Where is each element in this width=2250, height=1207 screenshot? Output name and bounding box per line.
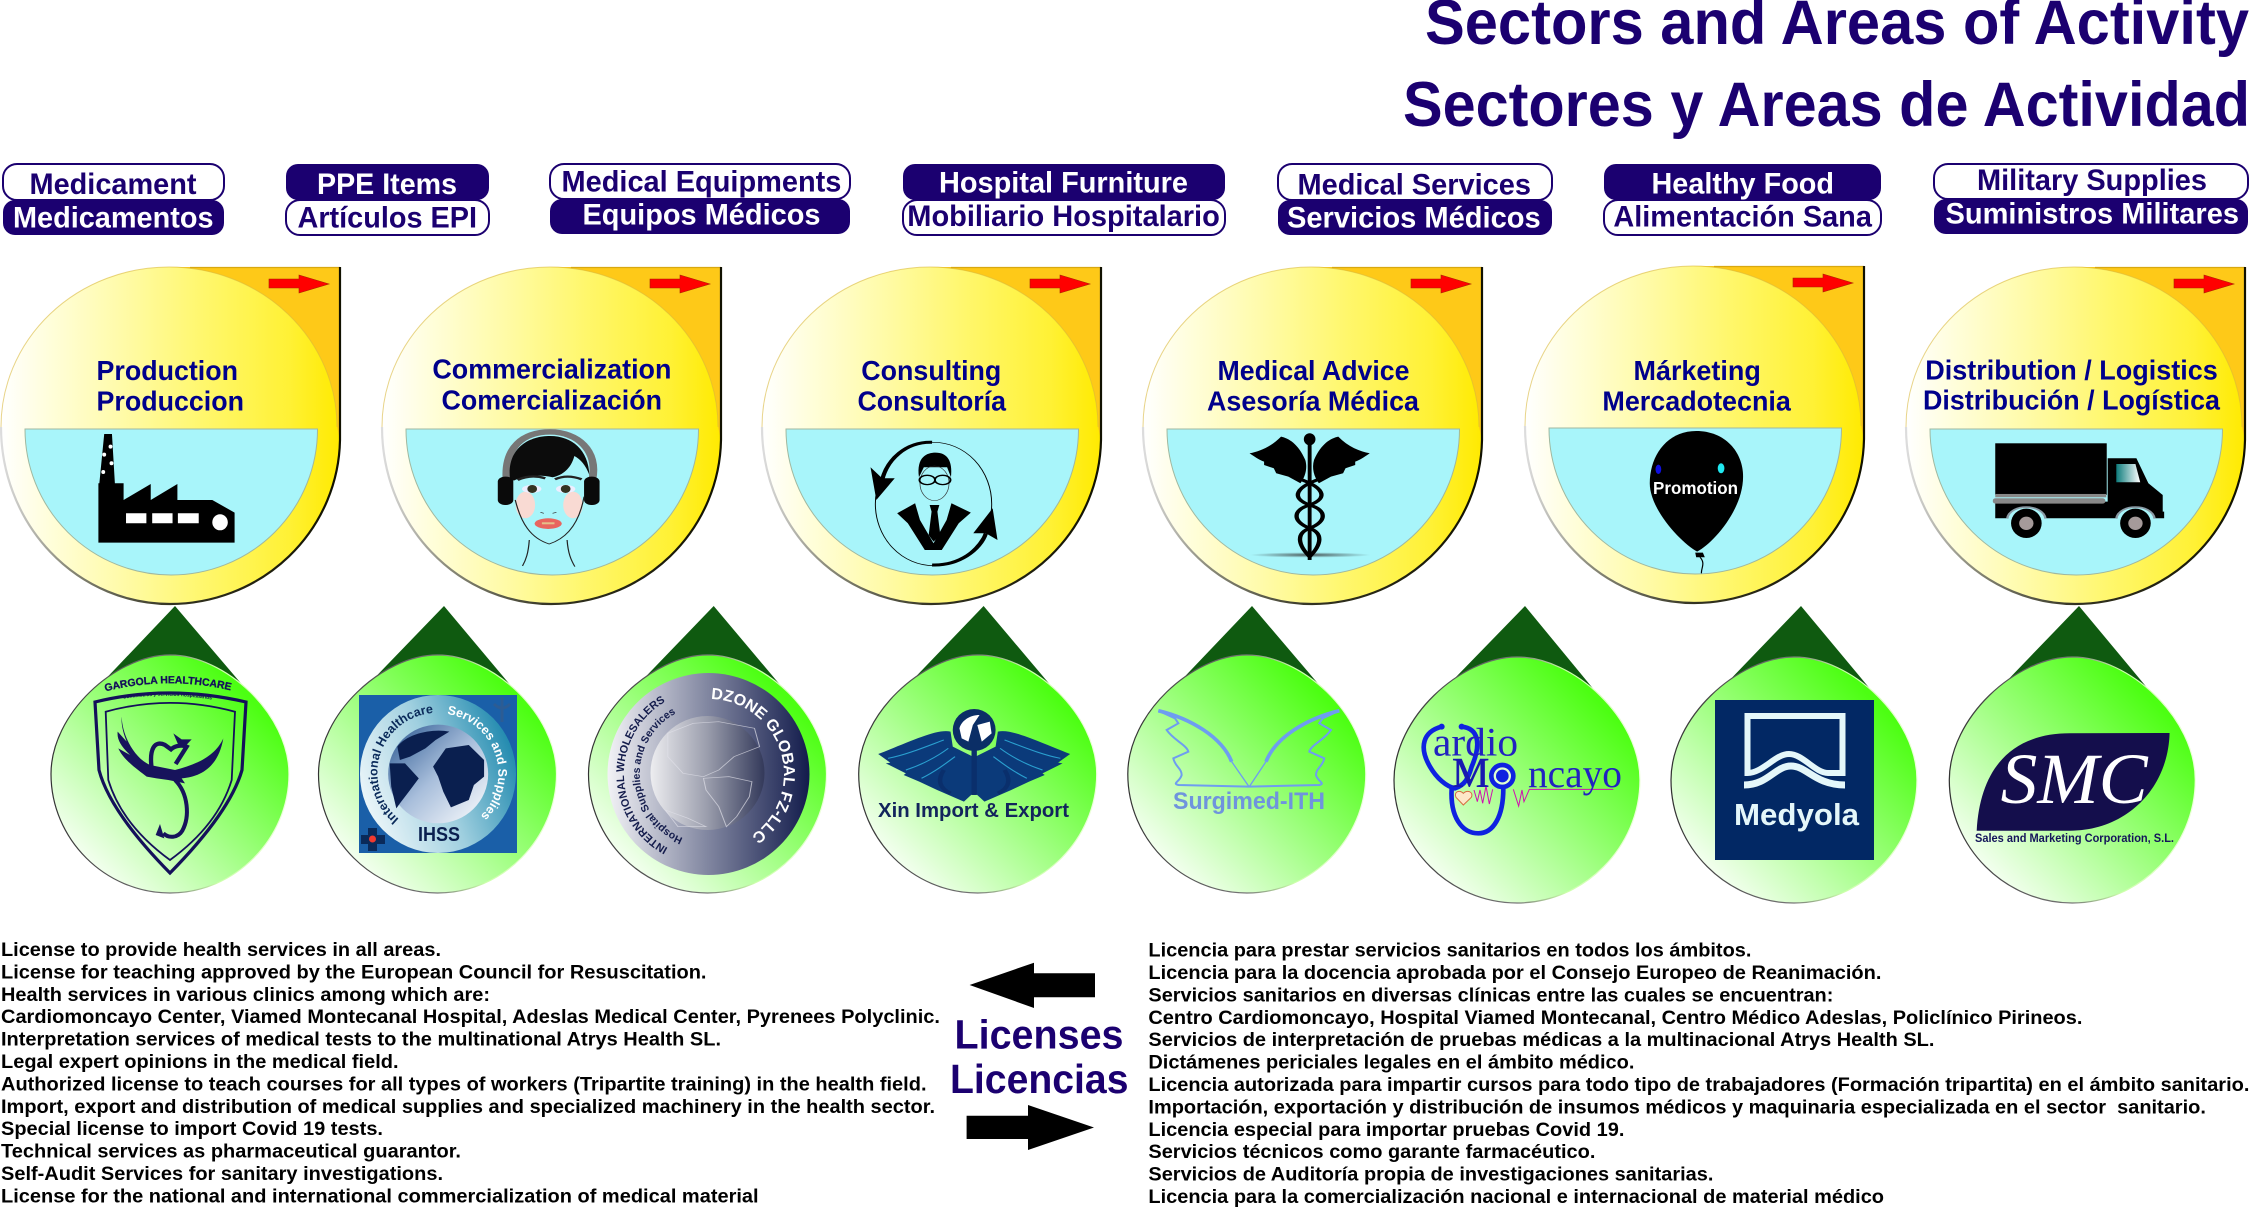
panel: Distribution: Distribución / Logística [1923,384,2220,415]
logo drop: Xin Import & Export [859,606,1097,893]
sector pill: Medical Services: Servicios Médicos [1287,202,1541,234]
text block: licenses in English: License for the national and international commercialization of medical material [1,1185,759,1207]
sector pill: PPE Items: PPE Items [317,168,457,201]
logo: IHSS globe badge: Services and Supplies [448,706,507,820]
logo: Gargola shield and dragon: Suministros y servicios hospitalarios [124,694,212,700]
panel: Commercialization [382,267,721,604]
text block: licenses in English: License to provide health services in all areas. [1,939,441,961]
sector pill: Medicament: Medicamentos [13,202,214,234]
logo drop: Surgimed-ITH [1128,606,1366,893]
panel: Commercialization: Comercialización [442,384,662,415]
heading: Licenses / Licencias [950,1012,1128,1102]
logo: Cardio Moncayo stethoscope: M [1452,751,1489,797]
sector pill: Military Supplies [1934,164,2248,234]
icon: consultant with cycle arrows [871,442,998,566]
arrow: pointing left [970,963,1095,1008]
logo drop: SMC [1949,606,2195,903]
logo: IHSS globe badge: IHSS [418,824,460,846]
logo drop: IHSS [318,606,557,894]
text block: licenses in English: License for teaching approved by the European Council for Resuscitation. [1,961,706,983]
arrow: pointing right [967,1105,1094,1150]
logo drop: Medyola [1671,606,1917,903]
panel: Commercialization: Commercialization [432,354,671,385]
logo: Surgimed wings [1158,711,1339,815]
panel: Production [1,267,340,604]
sector pill: Medical Services: Medical Services [1298,168,1531,201]
icon: balloon: Promotion [1653,478,1738,498]
logo: DZONE round badge: INTERNATIONAL WHOLESALERS [616,696,668,854]
logo: IHSS globe badge: International Healthcare [368,706,432,825]
sector pill: Healthy Food [1604,164,1881,235]
text block: licenses in English: Interpretation services of medical tests to the multinational Atrys Health SL. [1,1029,721,1051]
panel: Production: Production [96,355,238,386]
text block: licenses in English: Authorized license to teach courses for all types of workers (Tripartite training) in the health field. [1,1073,926,1095]
logo: DZONE round badge [608,673,810,875]
sector pill: Medical Equipments [550,164,850,234]
panel: Marketing [1525,266,1864,603]
text block: licenses in English [1,939,940,1207]
panel: Marketing: Márketing [1634,355,1761,386]
text block: licenses in Spanish: Centro Cardiomoncayo, Hospital Viamed Montecanal, Centro Médico Adeslas, Policlínico Pirineos. [1148,1007,2082,1029]
text block: licenses in Spanish: Licencia autorizada para impartir cursos para todo tipo de trabajadores (Formación tripartita) en el ámbito sanitario. [1148,1074,2249,1096]
text block: licenses in English: Special license to import Covid 19 tests. [1,1118,383,1140]
logo: Cardio Moncayo stethoscope: ncayo [1528,751,1622,796]
logo: Gargola shield and dragon: GARGOLA HEALTHCARE [104,676,232,691]
icon: truck [1993,443,2164,538]
logo: Cardio Moncayo stethoscope [1424,720,1622,833]
sector pill: Medical Equipments: Medical Equipments [562,166,841,199]
logo: winged globe [878,709,1070,822]
text block: licenses in English: Self-Audit Services for sanitary investigations. [1,1163,443,1185]
logo drop: Gargola Healthcare [50,606,290,894]
text block: licenses in Spanish: Licencia para prestar servicios sanitarios en todos los ámbitos. [1148,940,1751,962]
sector pill: Hospital Furniture [903,164,1225,235]
text block: licenses in Spanish: Licencia especial para importar pruebas Covid 19. [1148,1119,1624,1141]
text block: licenses in Spanish: Servicios de interpretación de pruebas médicas a la multinacional Atrys Health SL. [1148,1029,1934,1051]
text block: licenses in English: Cardiomoncayo Center, Viamed Montecanal Hospital, Adeslas Medical Center, Pyrenees Polyclinic. [1,1006,940,1028]
logo: SMC leaf [1975,733,2174,845]
sector pill: Healthy Food: Alimentación Sana [1613,200,1872,234]
icon: woman with headset [498,432,600,567]
text block: licenses in Spanish: Licencia para la docencia aprobada por el Consejo Europeo de Reanimación. [1148,962,1881,984]
logo: Gargola shield and dragon [93,676,248,876]
logo: Medyola square [1715,700,1874,860]
text block: licenses in Spanish: Servicios sanitarios en diversas clínicas entre las cuales se encuentran: [1148,984,1833,1006]
sector pill: PPE Items: Artículos EPI [298,202,477,234]
text block: licenses in Spanish: Servicios técnicos como garante farmacéutico. [1148,1141,1595,1163]
sector pill: PPE Items [286,164,489,235]
panel: Consulting: Consultoría [858,386,1006,417]
panel: Medical Advice: Medical Advice [1218,355,1410,386]
logo: IHSS globe badge [359,695,517,853]
logo: SMC leaf: SMC [2001,739,2149,819]
logo drop: Cardio Moncayo [1394,606,1640,903]
text block: licenses in English: Technical services as pharmaceutical guarantor. [1,1141,461,1163]
logo: Cardio Moncayo stethoscope: ardio [1433,720,1518,765]
icon: balloon [1650,431,1743,573]
panel: Medical Advice [1143,267,1482,604]
icon: caduceus [1250,433,1371,560]
logo: Medyola square: Medyola [1734,797,1860,832]
text block: licenses in English: Import, export and distribution of medical supplies and specialized machinery in the health sector. [1,1096,935,1118]
sector pill: Medicament [3,164,224,235]
logo: winged globe: Xin Import & Export [878,800,1069,822]
text block: licenses in Spanish: Importación, exportación y distribución de insumos médicos y maquinaria especializada en el sector sanitario. [1148,1096,2206,1118]
logo: DZONE round badge: DZONE GLOBAL FZ-LLC [712,688,795,843]
text block: licenses in Spanish: Dictámenes periciales legales en el ámbito médico. [1148,1052,1634,1074]
sector pill: Medical Services [1278,164,1552,235]
heading: Licenses / Licencias: Licencias [950,1056,1128,1102]
sector pill: Hospital Furniture: Mobiliario Hospitalario [907,200,1220,233]
text block: licenses in Spanish [1148,940,2249,1207]
text block: licenses in English: Health services in various clinics among which are: [1,984,490,1006]
logo: Surgimed wings: Surgimed-ITH [1173,788,1325,815]
sector pill: Medical Equipments: Equipos Médicos [582,198,820,231]
heading: Licenses / Licencias: Licenses [954,1012,1124,1058]
icon: factory [98,434,235,543]
panel: Consulting: Consulting [861,355,1001,386]
title [1403,0,2250,140]
panel: Consulting [762,267,1101,604]
panel: Distribution: Distribution / Logistics [1925,354,2218,385]
panel: Distribution [1906,267,2245,604]
sector pill: Medicament: Medicament [30,168,196,201]
logo drop: DZONE Global [588,606,827,894]
panel: Medical Advice: Asesoría Médica [1207,386,1419,417]
sector pill: Military Supplies: Suministros Militares [1946,197,2239,230]
sector pill: Military Supplies: Military Supplies [1977,164,2207,197]
sector pill: Hospital Furniture: Hospital Furniture [939,167,1188,200]
text block: licenses in Spanish: Servicios de Auditoría propia de investigaciones sanitarias. [1148,1164,1713,1186]
sector pill: Healthy Food: Healthy Food [1652,168,1834,200]
panel: Production: Produccion [96,386,244,417]
logo: SMC leaf: Sales and Marketing Corporation, S.L. [1975,833,2174,845]
text block: licenses in English: Legal expert opinions in the medical field. [1,1051,398,1073]
logo: DZONE round badge: Hospital Supplies and Services [632,709,682,844]
panel: Marketing: Mercadotecnia [1602,386,1791,417]
